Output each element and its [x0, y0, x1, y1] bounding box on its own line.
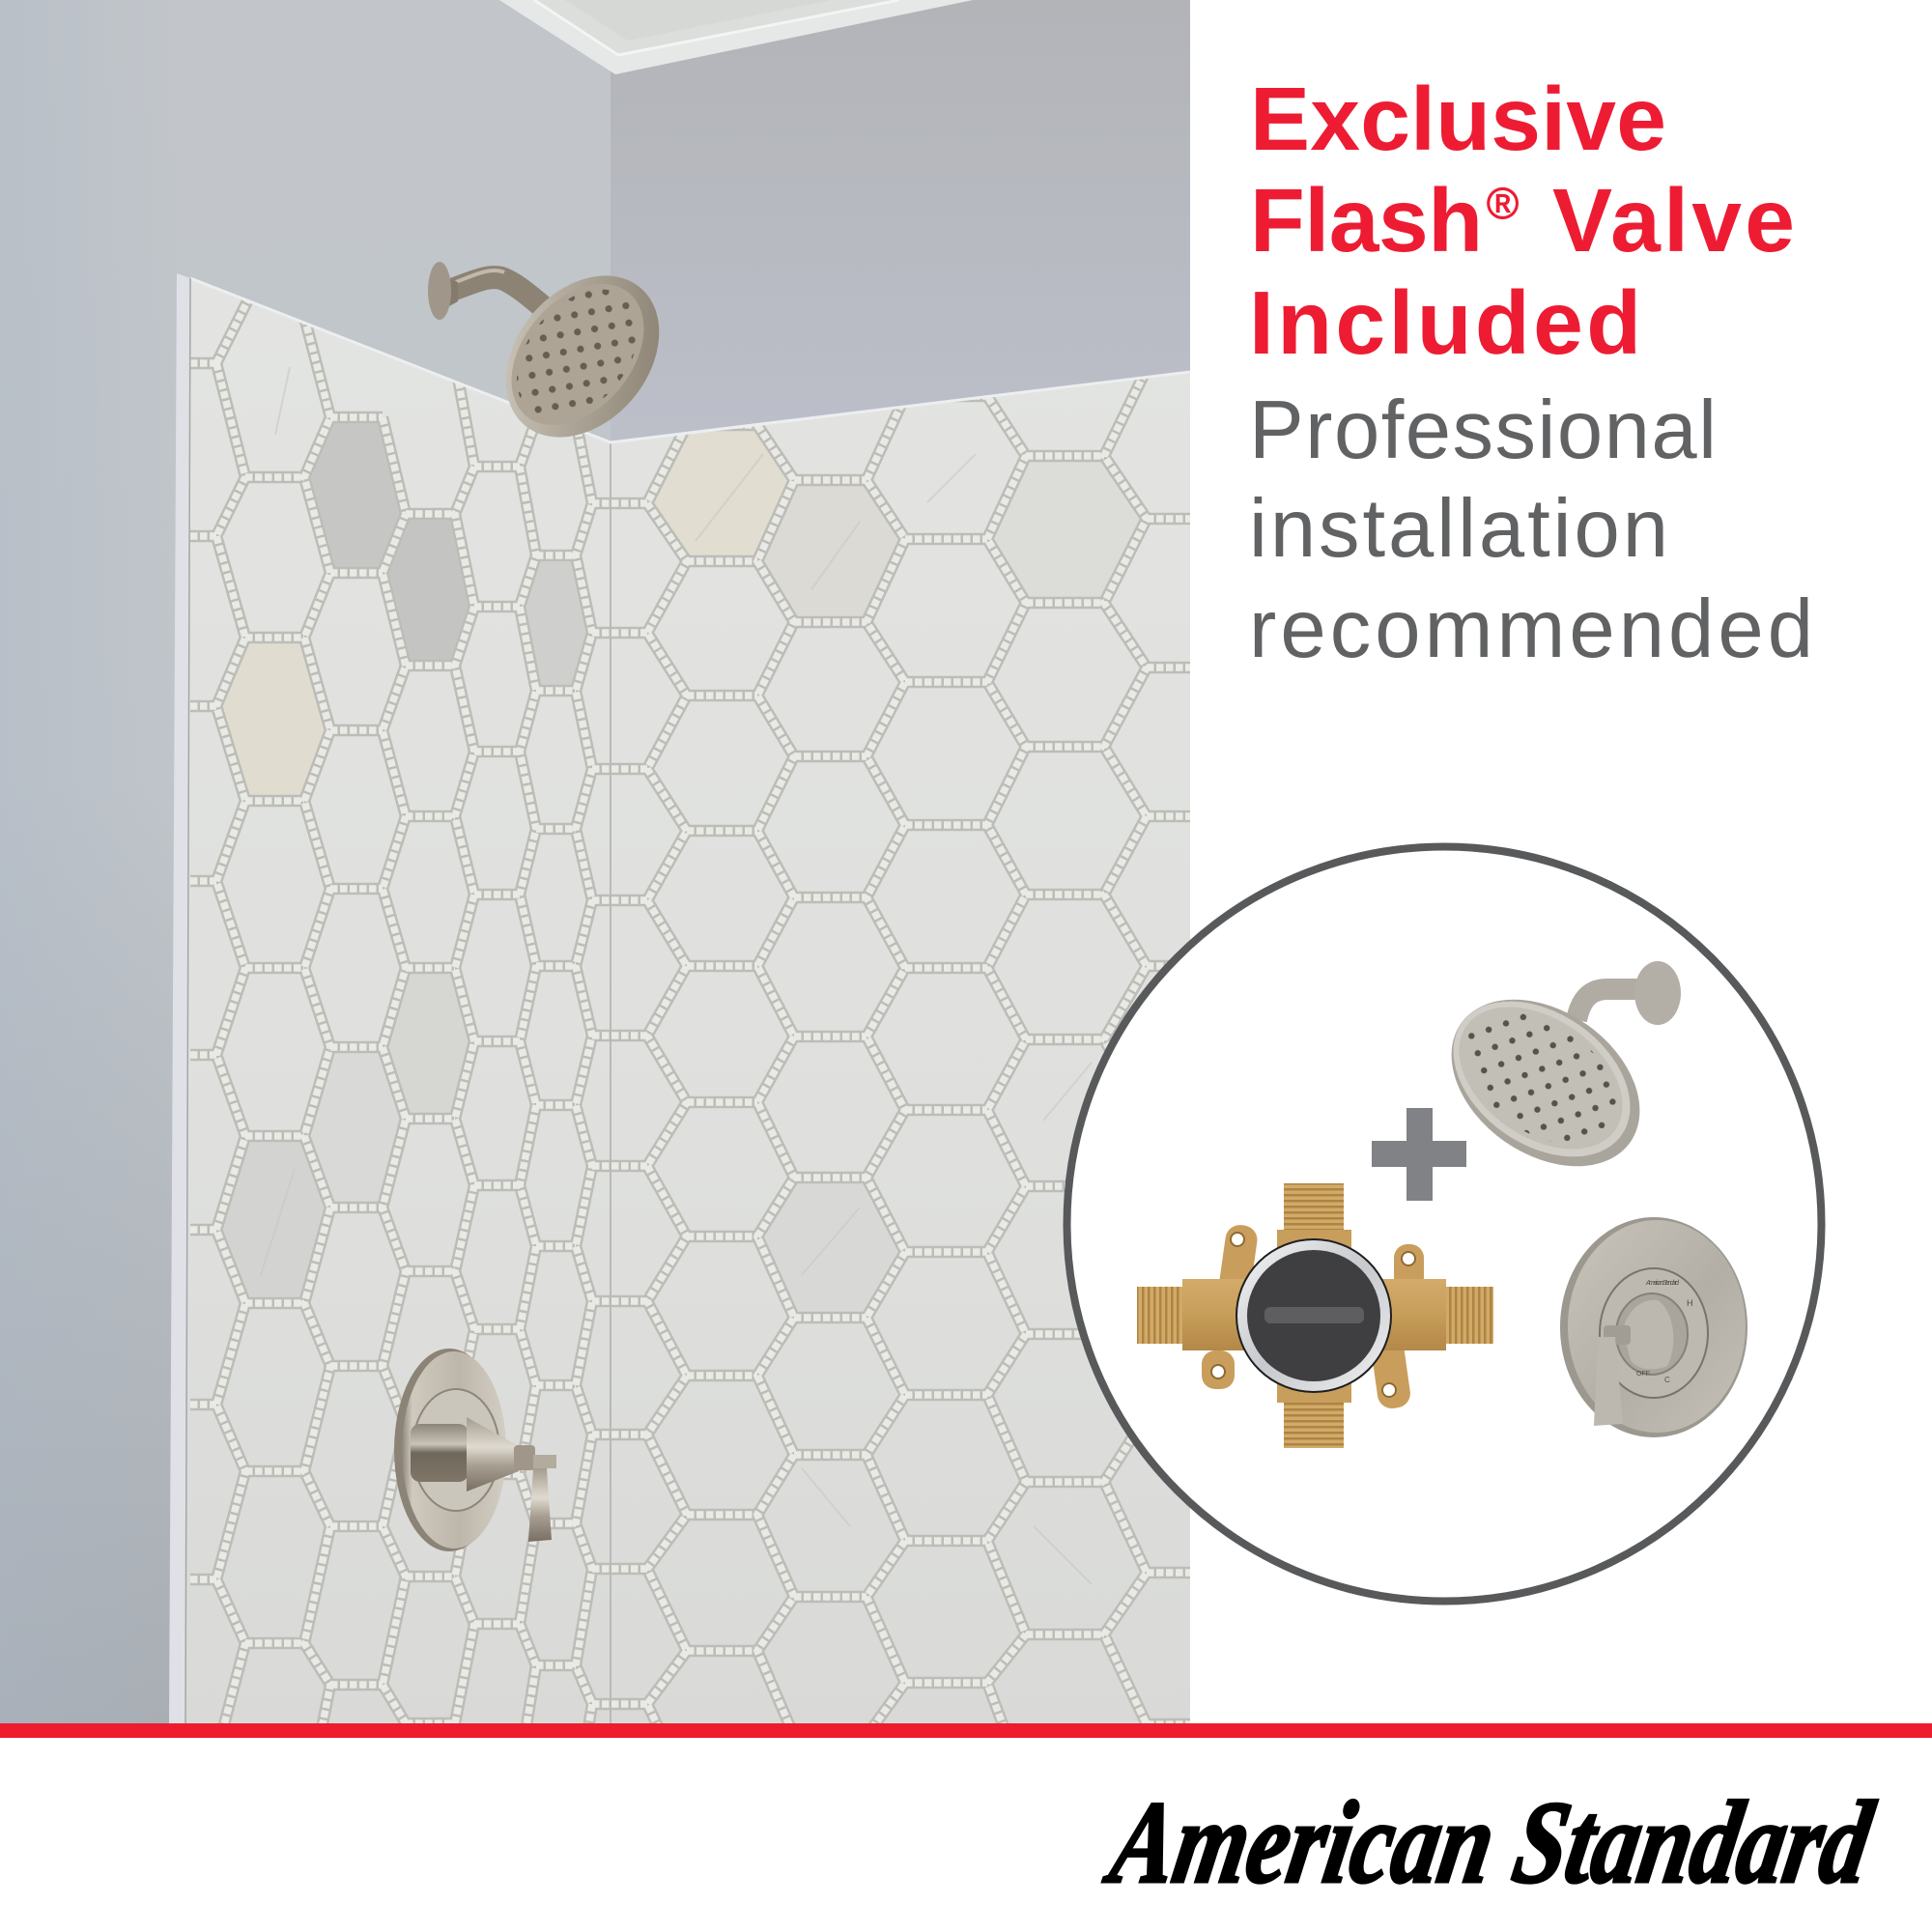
red divider bar: [0, 1723, 1932, 1738]
corner trim strip: [169, 273, 190, 1724]
mounting ears: [1202, 1223, 1424, 1410]
ceiling and crown moulding: [499, 0, 973, 74]
black plaster guard: [1247, 1250, 1380, 1381]
brass body: [1182, 1279, 1446, 1350]
callout circle: what's included: [1066, 846, 1822, 1602]
heading: exclusive flash valve included: Exclusive: [1250, 69, 1666, 169]
heading: exclusive flash valve included: ®: [1487, 179, 1519, 228]
tile top edge trim: [190, 278, 1190, 442]
plate markings: American Standard: [1645, 1280, 1680, 1287]
product: brass rough-in valve: [1137, 1183, 1493, 1448]
plate markings: OFF: [1636, 1371, 1650, 1378]
upper right wall paint: [611, 0, 1190, 444]
plate markings: C: [1664, 1376, 1670, 1384]
left wall edge tint: [0, 0, 184, 1724]
subheading: professional installation recommended: Professional: [1249, 384, 1717, 476]
circle ring: [1066, 846, 1822, 1602]
plate markings: H: [1687, 1298, 1692, 1308]
tile panel seam: [610, 442, 611, 1724]
chrome retaining ring: [1236, 1239, 1391, 1392]
plus sign: [1372, 1108, 1466, 1201]
subheading: professional installation recommended: installation: [1249, 483, 1668, 575]
product: trim plate and lever: [1560, 1217, 1747, 1437]
subheading: professional installation recommended: [1249, 384, 1813, 675]
heading: exclusive flash valve included: Valve: [1552, 170, 1795, 270]
mosaic grout strips: [190, 290, 1219, 1816]
heading: exclusive flash valve included: Flash: [1250, 170, 1483, 270]
subheading: professional installation recommended: recommended: [1249, 583, 1813, 675]
heading: exclusive flash valve included: Included: [1249, 272, 1641, 373]
rain shower head: [474, 245, 691, 468]
left wall paint: [0, 0, 618, 1724]
product: shower head: [1420, 961, 1681, 1201]
wall valve trim and lever: [394, 1349, 556, 1551]
white right panel: [1190, 0, 1932, 1724]
plate markings: [1636, 1280, 1692, 1384]
trim edge line: [185, 278, 190, 1724]
threaded ports: [1137, 1183, 1493, 1448]
heading: exclusive flash valve included: [1249, 69, 1795, 373]
wall-mounted shower arm: [428, 262, 553, 320]
tinted marble tiles: [216, 417, 1147, 1318]
guard handle bar: [1264, 1307, 1364, 1323]
marble veining: [261, 367, 1092, 1584]
hexagon marble tile surround: [184, 270, 1219, 1816]
shower scene photo: [0, 0, 1219, 1816]
ear holes: [1211, 1233, 1415, 1397]
